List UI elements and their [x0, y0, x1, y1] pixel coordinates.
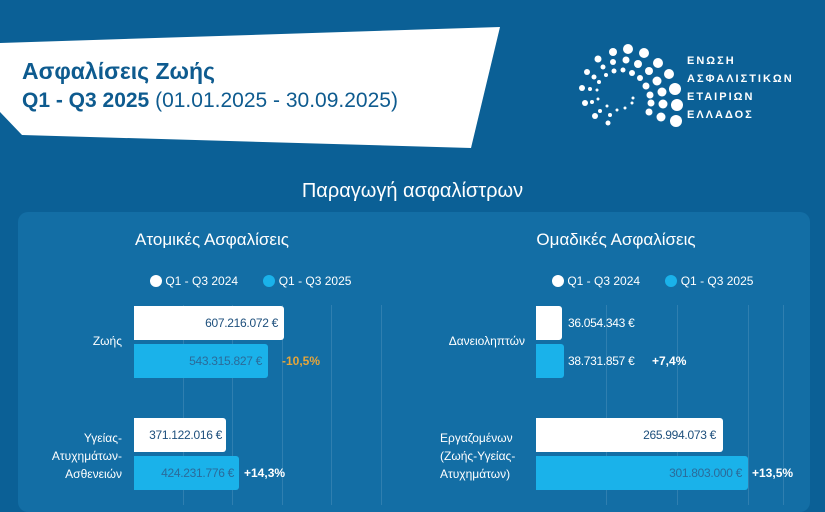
label: employees: Εργαζομένων — [440, 431, 513, 445]
title text: Q1 - Q3 2025 (01.01.2025 - 30.09.2025) — [22, 89, 398, 112]
chart: individual: 371.122.016 € — [149, 428, 222, 442]
chart: group: 38.731.857 € — [568, 354, 634, 368]
bar: health 2024 — [134, 418, 226, 452]
chart: individual — [52, 306, 320, 490]
panel: charts — [18, 212, 810, 512]
section heading: Παραγωγή ασφαλίστρων — [302, 180, 523, 202]
logo text — [687, 55, 794, 121]
chart: individual: 543.315.827 € — [189, 354, 262, 368]
label: health: Ατυχημάτων- — [52, 449, 122, 463]
chart: individual: -10,5% — [282, 354, 320, 368]
chart: group: 36.054.343 € — [568, 316, 634, 330]
bar: borrowers 2025 — [536, 344, 564, 378]
label: life: Ζωής — [93, 334, 122, 348]
chart: individual: 607.216.072 € — [205, 316, 278, 330]
heading: group: Ομαδικές Ασφαλίσεις — [536, 230, 696, 249]
logo — [579, 44, 794, 127]
logo text: ΕΛΛΑΔΟΣ — [687, 109, 754, 121]
chart: group: 265.994.073 € — [643, 428, 716, 442]
chart: group: +7,4% — [652, 354, 686, 368]
label: health — [52, 431, 122, 481]
logo text: ΑΣΦΑΛΙΣΤΙΚΩΝ — [687, 73, 794, 85]
bar: employees 2025 — [536, 456, 748, 490]
label: employees — [440, 431, 515, 481]
label: employees: Ατυχημάτων) — [440, 467, 510, 481]
legend: left: Q1 - Q3 2024 Q1 - Q3 2025 — [165, 274, 351, 288]
bar: employees 2024 — [536, 418, 723, 452]
label: health: Ασθενειών — [65, 467, 122, 481]
gridlines — [183, 305, 184, 505]
chart: individual: 424.231.776 € — [161, 466, 234, 480]
chart: group: 301.803.000 € — [669, 466, 742, 480]
label: employees: (Ζωής-Υγείας- — [440, 449, 515, 463]
bar: life 2025 — [134, 344, 268, 378]
logo text: ΕΤΑΙΡΙΩΝ — [687, 91, 754, 103]
chart: group: +13,5% — [752, 466, 793, 480]
label: borrowers: Δανειοληπτών — [449, 334, 525, 348]
chart: individual: +14,3% — [244, 466, 285, 480]
label: health: Υγείας- — [84, 431, 122, 445]
legend: right: Q1 - Q3 2024 Q1 - Q3 2025 — [567, 274, 753, 288]
bar: life 2024 — [134, 306, 284, 340]
title text — [22, 58, 398, 112]
bar: health 2025 — [134, 456, 239, 490]
heading: individual: Ατομικές Ασφαλίσεις — [135, 230, 289, 249]
bar: borrowers 2024 — [536, 306, 562, 340]
title text: Ασφαλίσεις Ζωής — [22, 58, 215, 84]
logo text: ΕΝΩΣΗ — [687, 55, 736, 67]
chart: group — [440, 306, 793, 490]
